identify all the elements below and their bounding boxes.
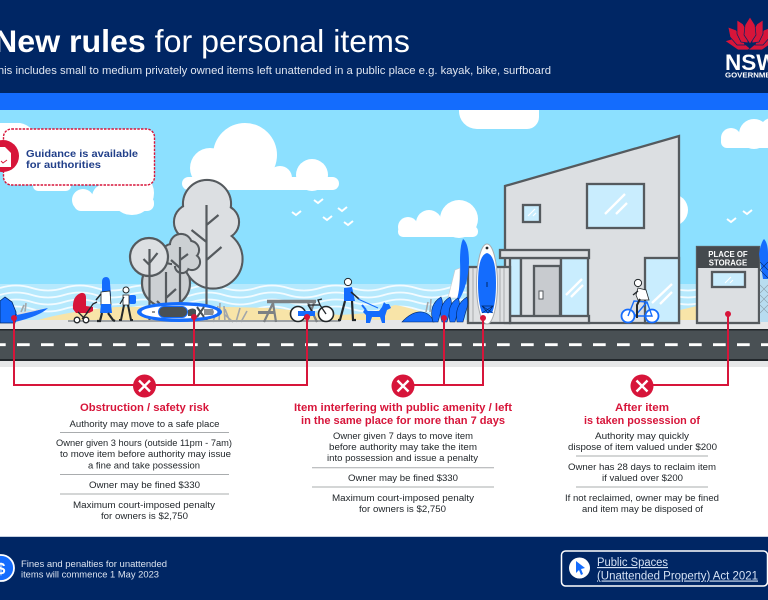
person walking dog bbox=[338, 278, 391, 323]
connector lines: amenity bbox=[403, 315, 486, 385]
connector lines: obstruction bbox=[11, 314, 310, 385]
road bbox=[0, 320, 768, 367]
panel: obstruction / safety risk: to move item before authority may issue bbox=[60, 449, 231, 460]
panel: obstruction / safety risk: a fine and take possession bbox=[88, 460, 200, 472]
panel: obstruction / safety risk: Owner may be fined $330 bbox=[89, 480, 200, 491]
link box: legislation: Public Spaces bbox=[597, 557, 668, 569]
panel: obstruction / safety risk bbox=[56, 402, 232, 522]
grass bbox=[21, 299, 431, 322]
icon: cross 1 bbox=[133, 374, 156, 398]
house bbox=[500, 136, 679, 323]
panel: public amenity: Owner may be fined $330 bbox=[348, 473, 458, 484]
place of storage bbox=[697, 247, 759, 323]
icon: cross 3 bbox=[630, 374, 654, 398]
header band bbox=[0, 0, 768, 110]
item: paddleboard bbox=[476, 244, 498, 324]
person with pram bbox=[73, 277, 115, 323]
child with backpack bbox=[119, 287, 136, 320]
water bbox=[0, 284, 768, 322]
sky bbox=[0, 110, 768, 286]
item: kayak under trees bbox=[137, 302, 222, 322]
panel: obstruction / safety risk: for owners is $2,750 bbox=[101, 511, 188, 522]
item: kayak on left bbox=[0, 297, 48, 323]
ground shadow bbox=[68, 320, 340, 322]
panel: after possession: if valued over $200 bbox=[602, 473, 683, 484]
sand bbox=[38, 305, 697, 322]
icon: cross 2 bbox=[392, 374, 414, 398]
panel: public amenity: Owner given 7 days to move item bbox=[333, 431, 473, 442]
birds bbox=[292, 199, 752, 225]
picnic table bbox=[258, 302, 317, 322]
panel: public amenity: into possession and issue a penalty bbox=[327, 453, 478, 464]
panel: after possession bbox=[565, 402, 719, 515]
footer band bbox=[0, 536, 768, 600]
subtitle: This includes small to medium privately owned items left unattended in a public place e.g. kayak, bike, surfboard bbox=[0, 65, 551, 77]
link box: legislation: (Unattended Property) Act 2021 bbox=[597, 570, 758, 582]
shed bbox=[468, 267, 510, 323]
panel: public amenity: before authority may take the item bbox=[329, 442, 477, 453]
panel: public amenity: for owners is $2,750 bbox=[359, 504, 446, 515]
item: boards against shed bbox=[402, 239, 469, 322]
panel: public amenity: in the same place for more than 7 days bbox=[301, 415, 505, 427]
panel: obstruction / safety risk: Owner given 3 hours (outside 11pm - 7am) bbox=[56, 438, 232, 449]
panel: after possession: If not reclaimed, owner may be fined bbox=[565, 493, 719, 504]
title: New rules for personal items bbox=[0, 23, 410, 59]
callout: guidance: Guidance is available bbox=[26, 149, 138, 160]
panel: after possession: Authority may quickly bbox=[595, 431, 689, 442]
panel: after possession: dispose of item valued under $200 bbox=[568, 442, 717, 453]
fines note: items will commence 1 May 2023 bbox=[21, 568, 159, 580]
panel: after possession: Owner has 28 days to reclaim item bbox=[568, 462, 716, 473]
clouds bbox=[0, 110, 768, 238]
cyclist bbox=[622, 279, 658, 322]
place of storage: PLACE OF bbox=[708, 250, 748, 259]
place of storage: STORAGE bbox=[709, 258, 747, 268]
panel: obstruction / safety risk: Authority may move to a safe place bbox=[70, 419, 220, 430]
trees bbox=[130, 180, 242, 322]
fines note: Fines and penalties for unattended bbox=[21, 558, 167, 569]
link box: legislation bbox=[562, 551, 768, 586]
panel: public amenity bbox=[294, 402, 512, 515]
panel: public amenity: Item interfering with public amenity / left bbox=[294, 402, 512, 414]
callout: guidance bbox=[0, 129, 154, 185]
icon: dollar bbox=[0, 555, 14, 581]
fines note bbox=[21, 558, 167, 580]
panel: obstruction / safety risk: Obstruction / safety risk bbox=[80, 402, 210, 414]
panel: public amenity: Maximum court-imposed penalty bbox=[332, 493, 474, 504]
connector line: storage bbox=[642, 311, 731, 385]
callout: guidance: for authorities bbox=[26, 160, 101, 171]
NSW Government logo bbox=[725, 17, 768, 80]
panel: after possession: and item may be disposed of bbox=[582, 504, 703, 515]
panel: after possession: is taken possession of bbox=[584, 415, 700, 427]
fence and board at right edge bbox=[759, 239, 768, 322]
panel: obstruction / safety risk: Maximum court-imposed penalty bbox=[73, 500, 215, 511]
item: bike bbox=[290, 299, 334, 322]
panel: after possession: After item bbox=[615, 402, 669, 414]
